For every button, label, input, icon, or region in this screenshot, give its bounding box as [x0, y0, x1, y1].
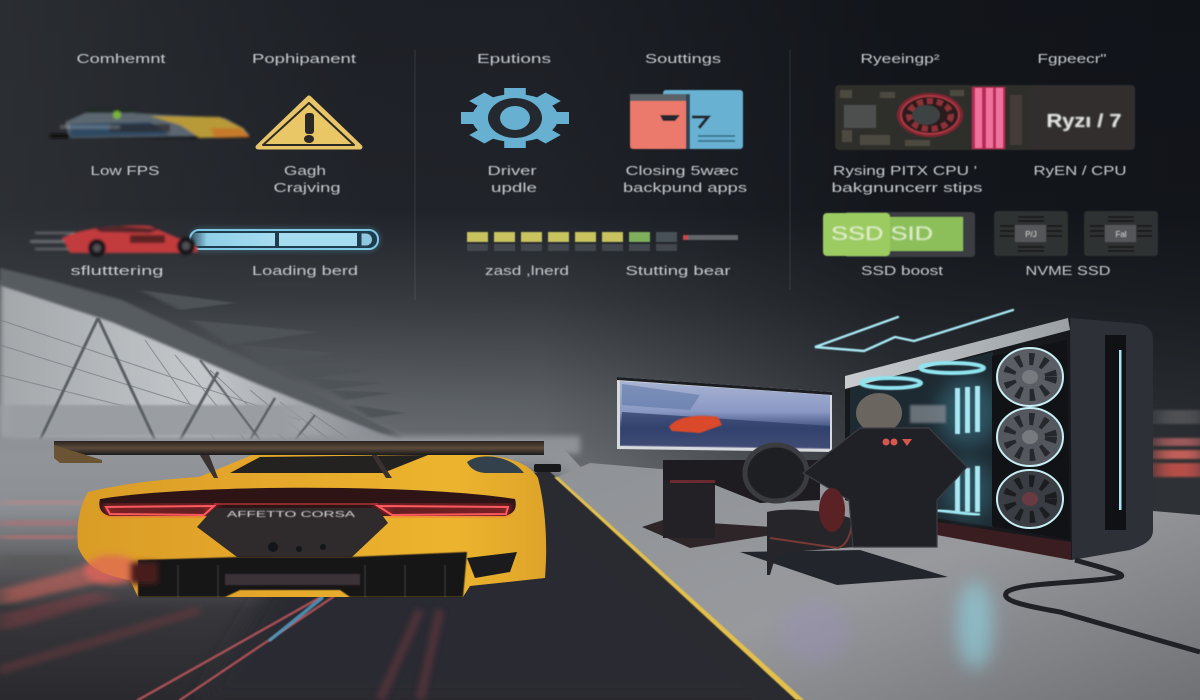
motion streaks	[0, 410, 1200, 700]
icon: nvme chip 1: P/J	[1025, 230, 1037, 239]
glowing bars	[955, 386, 980, 512]
label: Gagh Crajving: Gagh	[284, 164, 326, 178]
panel: solutions	[461, 52, 747, 278]
label: Closing 5wæc backpund apps: backpund apps	[623, 181, 747, 195]
car body	[77, 452, 546, 597]
icon: nvme chip 2	[1084, 211, 1158, 256]
label: Loading berd: Loading berd	[252, 264, 358, 278]
racing chair	[767, 428, 967, 575]
icon: nvme chip 1	[994, 211, 1068, 256]
icon: loading bar	[190, 228, 380, 251]
gaming rig	[617, 310, 1200, 652]
yellow track edge line	[554, 477, 804, 700]
icon: ssd drive	[823, 212, 975, 257]
fan 2	[997, 408, 1063, 466]
cable	[1006, 560, 1200, 652]
exhaust glow	[84, 555, 158, 585]
icon: blurred racing car	[50, 108, 250, 138]
label: Closing 5wæc backpund apps: Closing 5wæc	[626, 164, 738, 178]
heading: Comhemnt: Comhemnt	[76, 52, 166, 66]
label: Driver updle	[488, 164, 537, 195]
heading: Eputions: Eputions	[477, 52, 551, 66]
label: SSD boost: SSD boost	[861, 264, 944, 278]
label: RyEN / CPU: RyEN / CPU	[1034, 164, 1126, 178]
steering wheel	[745, 445, 807, 501]
right floor	[555, 463, 1200, 700]
vertical led	[1119, 350, 1122, 510]
person head	[856, 393, 902, 433]
side window	[467, 456, 524, 473]
icon: segmented progress squares	[467, 232, 738, 251]
label: Driver updle: Driver	[488, 164, 536, 178]
heading: Ryeeingp: Ryeeingp²	[860, 52, 940, 66]
fan frame	[992, 340, 1070, 540]
label: Rysing PITX CPU	[832, 164, 982, 195]
icon: cpu board	[835, 85, 1135, 150]
tail lights	[106, 504, 508, 515]
label: Stutting bear: Stutting bear	[626, 264, 730, 278]
track and ground	[0, 436, 800, 700]
label: Gagh Crajving	[274, 164, 341, 195]
dividers	[415, 50, 790, 300]
icon: closing apps windows	[630, 90, 743, 149]
panel: problems	[30, 52, 380, 278]
icon: warning triangle	[258, 98, 360, 147]
label: sflutttering: sflutttering	[70, 264, 164, 278]
rear window	[230, 455, 428, 473]
monitor	[617, 377, 832, 452]
panel: upgrades	[823, 52, 1158, 278]
icon: gear	[461, 88, 569, 148]
chair mat	[740, 550, 948, 585]
right vent	[467, 552, 517, 578]
led light sign	[815, 310, 1013, 351]
interior	[850, 352, 993, 527]
label: Gagh Crajving: Crajving	[274, 181, 341, 195]
case bottom	[937, 522, 1071, 560]
bridge over the track	[0, 268, 405, 455]
fan 3	[997, 470, 1063, 528]
heading: Pophipanent: Pophipanent	[252, 52, 357, 66]
chip label: Ryzı / 7	[1046, 111, 1122, 131]
rear wing	[54, 441, 561, 478]
car badge text: AFFETTO CORSA	[227, 509, 356, 519]
icon: ssd drive: SSD SID	[831, 224, 933, 245]
icon: red racing car	[30, 226, 198, 257]
chair logo	[882, 438, 912, 446]
label: Closing 5wæc backpund apps	[623, 164, 747, 195]
tail light panel	[99, 488, 516, 516]
heading: Souttings: Souttings	[645, 52, 721, 66]
label: NVME SSD: NVME SSD	[1026, 264, 1110, 278]
race car rear view	[54, 441, 561, 597]
cooling rings	[861, 363, 984, 388]
label: zasd lnerd: zasd ,lnerd	[485, 264, 569, 278]
centre panel	[197, 508, 388, 557]
label: Low FPS: Low FPS	[90, 164, 160, 178]
fan 1	[997, 348, 1063, 406]
diffuser	[138, 552, 467, 597]
game car on screen	[669, 416, 722, 433]
desk stand	[642, 460, 820, 548]
icon: nvme chip 2: Fal	[1115, 230, 1127, 239]
sensors	[268, 542, 326, 552]
label: Driver updle: updle	[491, 181, 537, 195]
label: Rysing PITX CPU: bakgnuncerr stips	[832, 181, 982, 195]
pc case	[845, 318, 1153, 560]
heading: Fgpeecr: Fgpeecr"	[1038, 52, 1106, 66]
label: Rysing PITX CPU: Rysing PITX CPU '	[833, 164, 977, 178]
